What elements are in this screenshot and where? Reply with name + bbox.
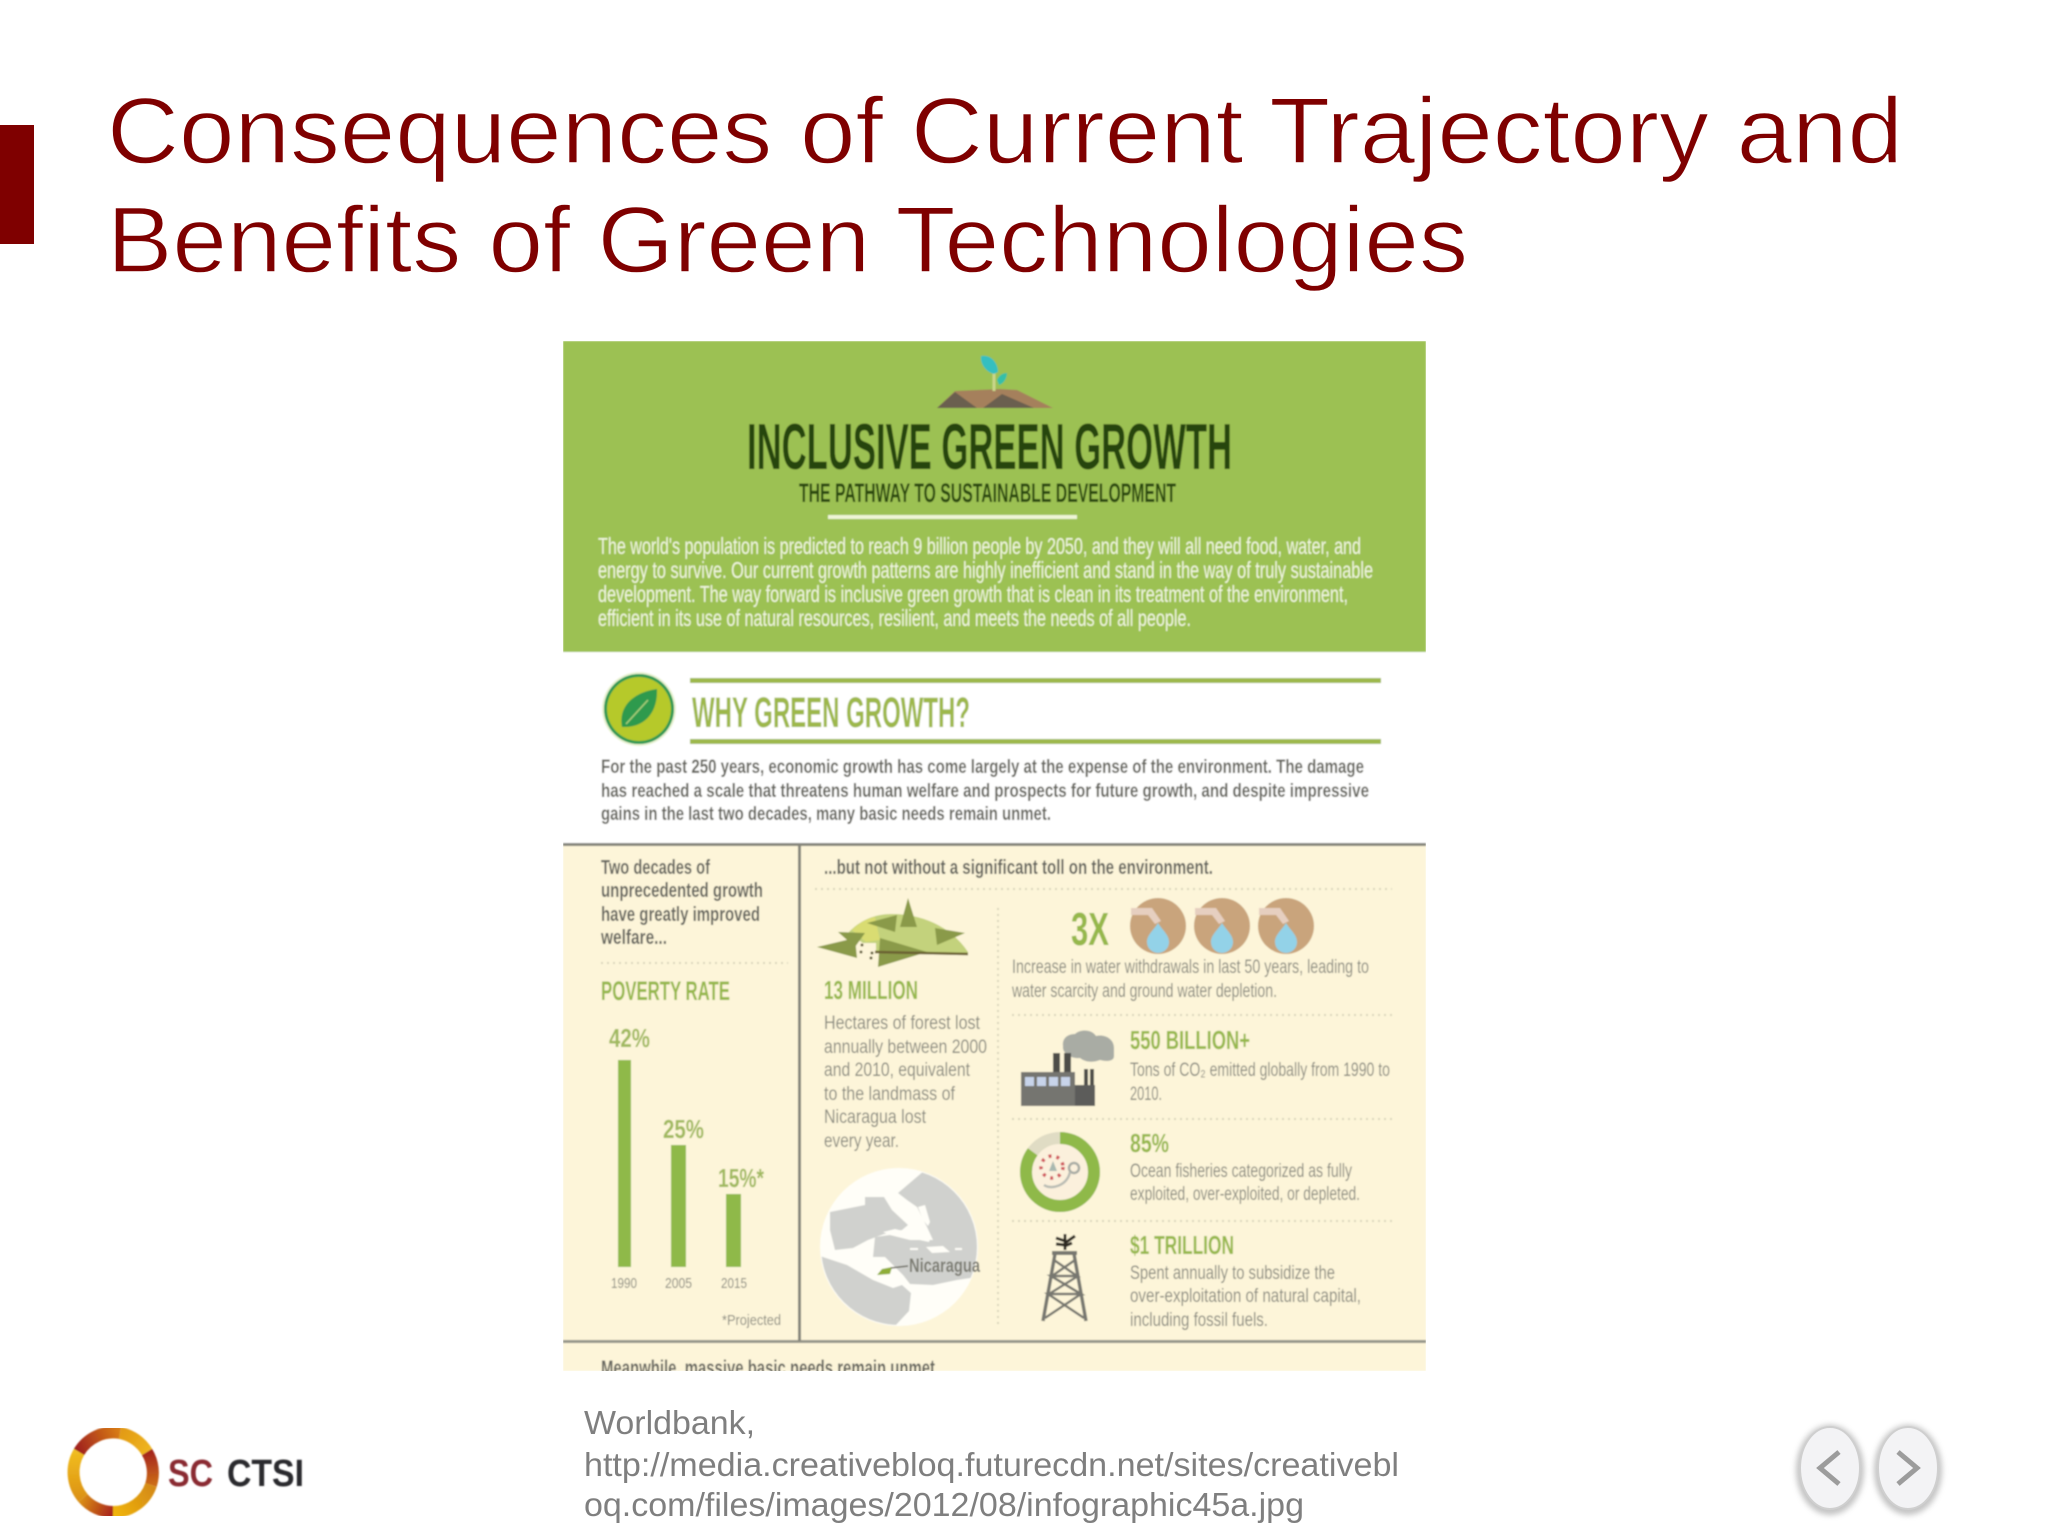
stat: 3X water: 3X [1071,903,1109,955]
section rules [690,678,1381,744]
header rule [828,515,1077,519]
accent bar [0,125,34,244]
bar chart: poverty rate: 25% [663,1114,704,1144]
logo: SC CTSI: SC [168,1453,213,1495]
stat: 1 trillion: $1 TRILLION [1130,1230,1234,1260]
bar chart: poverty rate [601,976,781,1329]
source citation: Worldbank, [584,1404,755,1441]
stat: 550 billion [1021,1025,1390,1106]
stat: 1 trillion: including fossil fuels. [1130,1310,1268,1331]
stat: 3X water: Increase in water withdrawals in last 50 years, leading to [1012,957,1369,978]
left column intro: welfare... [600,927,667,949]
source citation: http://media.creativebloq.futurecdn.net/sites/creativebl [584,1446,1399,1483]
icon: logo ring [74,1432,153,1512]
infographic [563,341,1426,1380]
section paragraph [601,757,1369,825]
left column intro: Two decades of [601,857,710,879]
stat: 550 billion: 2010. [1130,1084,1162,1105]
stat: 85 percent: exploited, over-exploited, or depleted. [1130,1184,1360,1205]
bar chart: poverty rate: 42% [609,1023,650,1053]
stat: 13 million: Nicaragua lost [824,1107,927,1128]
source citation [584,1404,1399,1523]
stat: 3X water [1011,898,1369,1002]
stat: 1 trillion: over-exploitation of natural capital, [1130,1286,1361,1307]
stat: 13 million [824,975,987,1152]
icon: water taps [1130,898,1314,954]
stat: 85 percent: Ocean fisheries categorized as fully [1130,1161,1352,1182]
left column intro: unprecedented growth [601,880,763,902]
left column intro [600,857,763,949]
right column heading: ...but not without a significant toll on the environment. [824,857,1213,879]
stat: 13 million: every year. [824,1131,899,1152]
icon: factory [1021,1030,1114,1106]
panel: green header [563,341,1426,652]
stat: 13 million: Hectares of forest lost [824,1013,981,1034]
bar chart: poverty rate: *Projected [722,1312,781,1329]
main heading: INCLUSIVE GREEN GROWTH [747,410,1232,483]
icon: fisheries donut [1026,1138,1094,1206]
stat: 85 percent [1026,1128,1360,1206]
section heading: WHY GREEN GROWTH? [692,689,970,737]
stat: 1 trillion: Spent annually to subsidize the [1130,1263,1335,1284]
icon: oil rig [1043,1234,1086,1321]
left column intro: have greatly improved [601,904,760,926]
panel: why green growth [601,672,1381,825]
intro paragraph: development. The way forward is inclusive green growth that is clean in its treatment of the environment, [598,581,1348,607]
bar chart: poverty rate: POVERTY RATE [601,976,730,1006]
stat: 13 million: and 2010, equivalent [824,1060,971,1081]
icon: previous arrow [1796,1425,1864,1515]
icon: sprout on mound [937,356,1053,408]
section paragraph: has reached a scale that threatens human welfare and prospects for future growth, and despite impressive [601,781,1369,802]
stat: 85 percent: 85% [1130,1128,1169,1158]
icon: leaf badge [602,672,676,746]
slide title: Benefits of Green Technologies [107,187,1468,292]
panel: cream data area [563,843,1426,1380]
logo: SC CTSI: CTSI [227,1453,304,1495]
section paragraph: gains in the last two decades, many basic needs remain unmet. [601,804,1051,825]
subheading: THE PATHWAY TO SUSTAINABLE DEVELOPMENT [799,478,1176,508]
clipped footer text: Meanwhile, massive basic needs remain unmet [601,1357,935,1380]
stat: 1 trillion [1043,1230,1361,1331]
section paragraph: For the past 250 years, economic growth has come largely at the expense of the environment. The damage [601,757,1364,778]
stat: 13 million: annually between 2000 [824,1037,987,1058]
map: Nicaragua globe [820,1168,980,1326]
source citation: oq.com/files/images/2012/08/infographic45a.jpg [584,1486,1304,1523]
stat: 13 million: to the landmass of [824,1084,956,1105]
bar chart: poverty rate: 2005 [665,1275,692,1292]
slide title [107,78,1903,292]
intro paragraph: efficient in its use of natural resources, resilient, and meets the needs of all people. [598,605,1191,631]
map: Nicaragua globe: Nicaragua [909,1256,980,1277]
bar chart: poverty rate: 1990 [611,1275,637,1292]
intro paragraph [598,533,1373,631]
stat: 3X water: water scarcity and ground water depletion. [1011,981,1277,1002]
stat: 550 billion: 550 BILLION+ [1130,1025,1250,1055]
intro paragraph: The world's population is predicted to reach 9 billion people by 2050, and they will all need food, water, and [598,533,1361,559]
navigation buttons [1796,1425,1942,1515]
intro paragraph: energy to survive. Our current growth patterns are highly inefficient and stand in the way of truly sustainable [598,557,1373,583]
logo: SC CTSI [74,1432,304,1512]
bar chart: poverty rate: 2015 [721,1275,747,1292]
stat: 550 billion: Tons of CO₂ emitted globally from 1990 to [1130,1060,1390,1081]
stat: 13 million: 13 MILLION [824,975,918,1005]
icon: deforested land [817,898,968,967]
slide title: Consequences of Current Trajectory and [107,78,1903,183]
icon: next arrow [1874,1425,1942,1515]
bar chart: poverty rate: 15%* [718,1163,765,1193]
